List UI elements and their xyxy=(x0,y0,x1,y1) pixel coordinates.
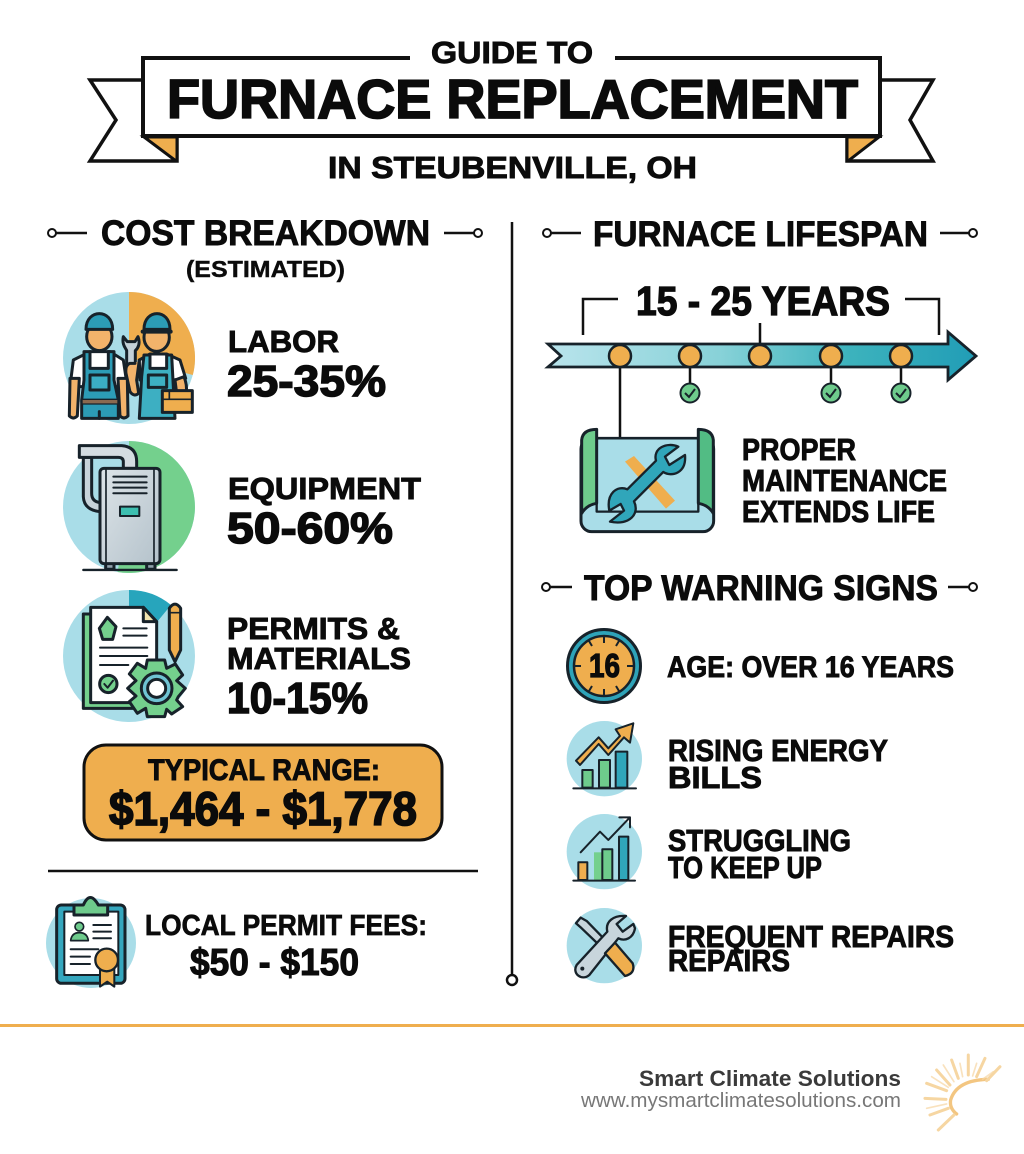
callout: typical range: $1,464 - $1,778 xyxy=(109,782,417,835)
label: equipment: EQUIPMENT xyxy=(228,471,421,506)
label: labor: LABOR xyxy=(228,324,339,359)
lifespan range label xyxy=(583,278,939,346)
label: equipment xyxy=(227,471,421,553)
worker two xyxy=(123,314,192,418)
icon: struggling chart xyxy=(567,814,642,889)
warning: frequent repairs: REPAIRS xyxy=(668,944,790,978)
callout: typical range xyxy=(84,745,442,840)
arrow body xyxy=(548,332,976,380)
warning: age: AGE: OVER 16 YEARS xyxy=(667,651,954,684)
logo: sun xyxy=(925,1055,1000,1130)
section heading: cost breakdown: COST BREAKDOWN xyxy=(101,214,430,253)
icon: labor pie with two workers xyxy=(63,292,195,424)
ribbon fold right xyxy=(847,137,879,161)
text: maintenance note: MAINTENANCE xyxy=(742,464,947,498)
icon: crossed tools xyxy=(567,908,642,983)
heading: guide to: GUIDE TO xyxy=(431,35,593,70)
warning: frequent repairs: FREQUENT REPAIRS xyxy=(668,920,954,954)
label: equipment: 50-60% xyxy=(227,504,393,553)
worker one xyxy=(69,314,128,418)
text: local permit fees: $50 - $150 xyxy=(190,942,359,984)
label: permits and materials: PERMITS & xyxy=(227,611,400,646)
ribbon tail left xyxy=(90,80,177,161)
label: permits and materials: MATERIALS xyxy=(227,641,411,676)
warning: frequent repairs xyxy=(668,920,954,978)
ribbon fold left xyxy=(144,137,177,161)
warning: struggling to keep up xyxy=(668,824,851,885)
section heading: furnace lifespan: FURNACE LIFESPAN xyxy=(593,215,928,254)
section heading: cost breakdown: (ESTIMATED) xyxy=(186,256,345,282)
ribbon tail right xyxy=(847,80,933,161)
heading: furnace replacement: FURNACE REPLACEMENT xyxy=(167,68,858,130)
text: maintenance note: PROPER xyxy=(742,433,856,467)
gear xyxy=(128,660,185,717)
label: permits and materials xyxy=(227,611,411,723)
wrench xyxy=(123,337,139,367)
icon: permit clipboard xyxy=(46,897,136,988)
icon: clock showing 16: 16 xyxy=(589,647,620,684)
section heading: top warning signs: TOP WARNING SIGNS xyxy=(584,569,938,608)
text: maintenance note xyxy=(742,433,947,529)
warning: rising energy bills: BILLS xyxy=(668,761,762,795)
icon: clock showing 16 xyxy=(568,630,640,702)
check marks xyxy=(680,384,910,402)
warning: struggling to keep up: TO KEEP UP xyxy=(668,851,822,885)
warning: struggling to keep up: STRUGGLING xyxy=(668,824,851,858)
callout: typical range: TYPICAL RANGE: xyxy=(148,754,380,787)
warning: rising energy bills: RISING ENERGY xyxy=(668,734,888,768)
label: labor: 25-35% xyxy=(227,357,386,406)
footer rule xyxy=(0,1024,1024,1027)
pencil xyxy=(169,604,181,662)
documents xyxy=(83,614,147,708)
label: labor xyxy=(227,324,386,406)
icon: maintenance scroll with wrench xyxy=(581,429,714,532)
banner frame xyxy=(143,58,880,136)
timeline arrow xyxy=(548,332,976,438)
footer brand xyxy=(580,1066,901,1112)
text: local permit fees xyxy=(145,910,427,984)
label: permits and materials: 10-15% xyxy=(227,674,368,723)
heading: location: IN STEUBENVILLE, OH xyxy=(328,150,697,185)
text: local permit fees: LOCAL PERMIT FEES: xyxy=(145,910,427,942)
footer brand: Smart Climate Solutions xyxy=(639,1066,901,1091)
timeline markers xyxy=(609,345,912,367)
warning: rising energy bills xyxy=(668,734,888,795)
icon: equipment pie with furnace xyxy=(63,441,195,573)
title banner xyxy=(90,35,933,185)
section heading: cost breakdown xyxy=(48,214,482,282)
footer brand: www.mysmartclimatesolutions.com xyxy=(580,1090,901,1112)
lifespan range label: 15 - 25 YEARS xyxy=(636,278,890,324)
column divider xyxy=(507,222,517,985)
duct xyxy=(83,457,100,512)
icon: permits pie with documents xyxy=(63,590,195,722)
text: maintenance note: EXTENDS LIFE xyxy=(742,495,935,529)
furnace body xyxy=(106,563,114,569)
icon: rising bills chart xyxy=(567,721,642,796)
